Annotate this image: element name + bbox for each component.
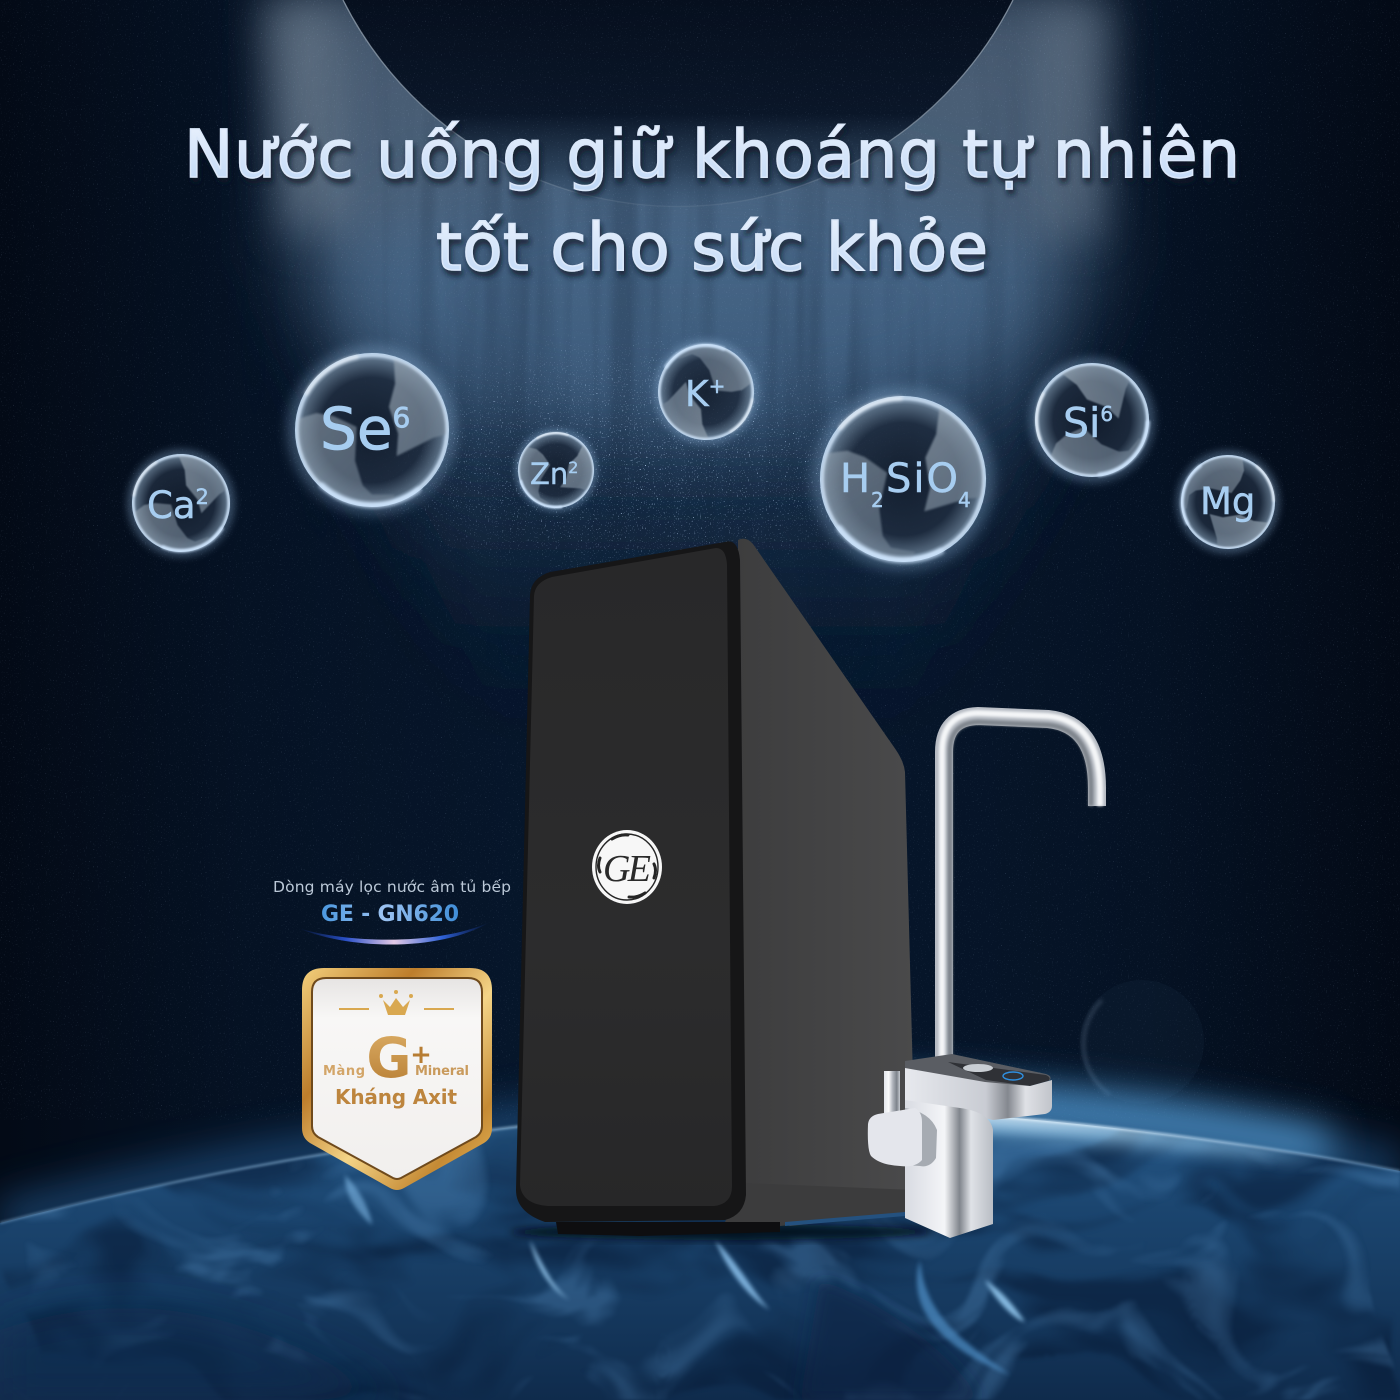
bubble: Si6: Si	[1063, 399, 1100, 447]
handle collar	[905, 1108, 937, 1166]
plus sign: +	[410, 1040, 432, 1070]
background: light beam with halo	[262, 0, 1112, 720]
bubble: Se6: 6	[392, 401, 410, 434]
background: vertical light streaks	[420, 155, 996, 453]
front panel	[520, 548, 732, 1206]
bubble: Ca2: Ca	[147, 484, 196, 527]
bubble: Zn2: Zn	[530, 457, 568, 491]
bubble: H2SiO4: 2	[871, 488, 884, 512]
model name: GE - GN620	[321, 902, 459, 927]
purifier shadow	[510, 1224, 930, 1240]
planet: horizon rim	[0, 1105, 1400, 1223]
bubble: Si6: 6	[1100, 402, 1113, 426]
title	[184, 116, 1240, 286]
column	[905, 1100, 993, 1238]
bubble: H2SiO4: 4	[958, 488, 971, 512]
side panel	[738, 539, 916, 1226]
faucet	[868, 713, 1100, 1238]
badge: G+ Mineral	[302, 968, 492, 1190]
badge frame	[302, 968, 492, 1190]
background: distant moon	[1080, 980, 1204, 1104]
bubble: K+	[638, 324, 774, 460]
Màng label: Màng	[323, 1064, 365, 1079]
bubble: K+: +	[709, 374, 725, 398]
bubble: Mg	[1168, 442, 1288, 562]
swoosh	[298, 922, 490, 945]
bubble: Ca2: 2	[196, 485, 209, 509]
planet: atmosphere glow	[0, 1100, 1400, 1223]
background: mineral particles	[386, 338, 870, 574]
product line label	[273, 878, 511, 945]
background: star field	[0, 0, 1400, 1120]
bubble: H2SiO4	[797, 373, 1009, 585]
feet	[556, 1222, 780, 1236]
GE logo: GE	[603, 848, 651, 890]
Kháng Axit label: Kháng Axit	[335, 1085, 457, 1109]
head block	[905, 1068, 1052, 1120]
title line 2: tốt cho sức khỏe	[436, 209, 988, 286]
base strip	[725, 1183, 916, 1226]
bubble: Se6: Se	[320, 395, 392, 463]
planet: surface with cloud swirls	[0, 1090, 1400, 1400]
bubble: Mg: Mg	[1200, 480, 1255, 523]
handle knob	[868, 1108, 922, 1166]
bubble: Zn2	[499, 413, 613, 527]
spout	[944, 716, 1097, 1065]
front shell	[516, 541, 746, 1222]
water purifier unit	[516, 539, 916, 1236]
bubble: Zn2: 2	[568, 458, 578, 477]
bubble: Se6	[287, 345, 457, 515]
G letter: G	[366, 1026, 412, 1090]
bubble: Si6	[1004, 332, 1180, 508]
lever	[884, 1071, 900, 1119]
title line 1: Nước uống giữ khoáng tự nhiên	[184, 116, 1240, 193]
background: dark disk at the top with thin ring	[343, 0, 1013, 206]
bubble: K+: K	[685, 374, 709, 415]
top plate	[905, 1054, 1050, 1086]
Mineral label: Mineral	[415, 1064, 469, 1079]
bubble: H2SiO4: SiO	[886, 456, 958, 502]
bubble: H2SiO4: H	[840, 456, 870, 502]
bubble: Ca2	[112, 434, 250, 572]
GE logo	[592, 830, 662, 904]
caption: Dòng máy lọc nước âm tủ bếp	[273, 878, 511, 896]
display icons	[963, 1064, 993, 1072]
crown icon	[339, 990, 454, 1015]
